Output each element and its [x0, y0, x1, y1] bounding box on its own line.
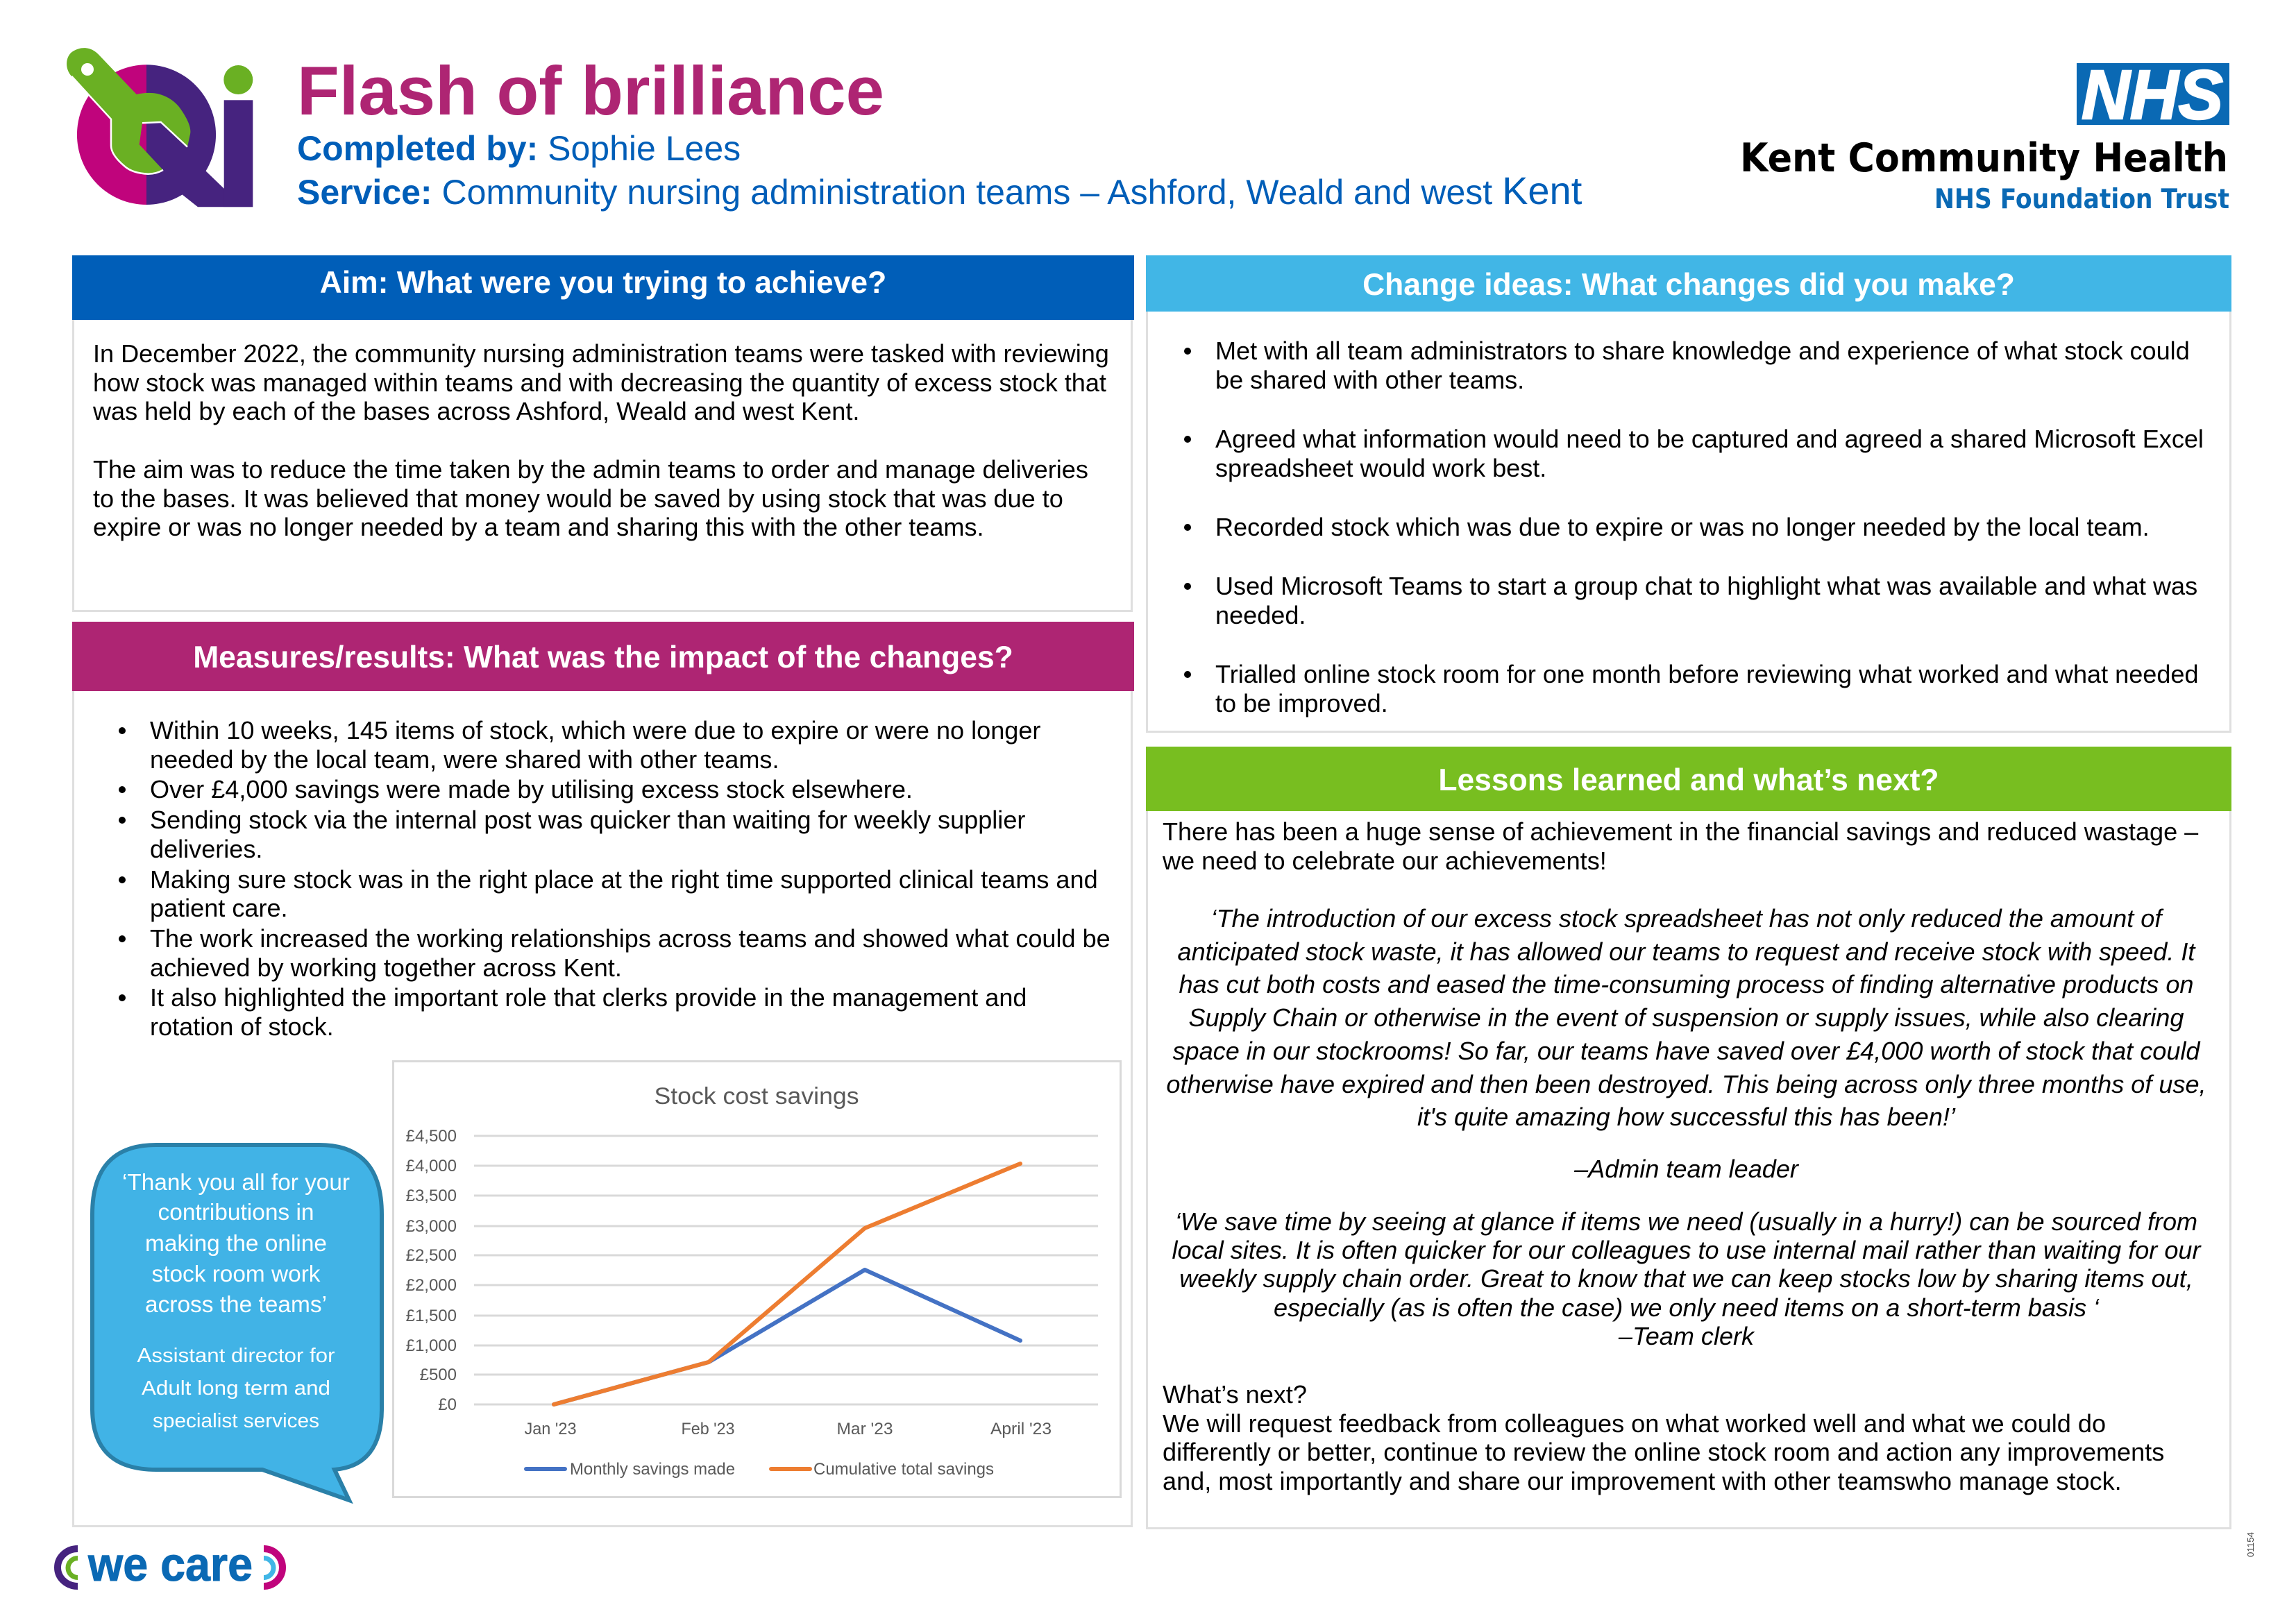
quote: team clerk: –Team clerk [1619, 1322, 1754, 1350]
callout: thank you quote: contributions in [158, 1199, 314, 1225]
callout: thank you quote [90, 1143, 384, 1504]
y axis labels: £1,000 [406, 1336, 457, 1355]
reference code: 01154 [2245, 1532, 2256, 1557]
list: changes: be shared with other teams. [1215, 366, 1524, 394]
callout: thank you quote: Adult long term and [142, 1377, 330, 1400]
quote: team clerk: local sites. It is often quicker for our colleagues to use internal mail rather than waiting for our [1172, 1236, 2200, 1264]
list: results: Within 10 weeks, 145 items of stock, which were due to expire or were no longer [150, 716, 1040, 745]
list: results: Sending stock via the internal post was quicker than waiting for weekly supplier [150, 806, 1025, 834]
logo: QI wrench [67, 48, 253, 207]
list: results: rotation of stock. [150, 1012, 334, 1041]
list: changes: Met with all team administrators to share knowledge and experience of what stock could [1215, 337, 2190, 365]
x axis labels: Jan '23 [525, 1420, 576, 1438]
list: results: achieved by working together across Kent. [150, 953, 622, 982]
panel: aim [72, 255, 1133, 612]
text: aim: how stock was managed within teams and with decreasing the quantity of excess stock that [93, 368, 1106, 397]
panel: change ideas [1146, 255, 2231, 733]
heading: lessons learned: Lessons learned and what’s next? [1438, 763, 1939, 797]
quote: admin team leader [1166, 904, 2206, 1131]
callout: thank you quote: Assistant director for [137, 1345, 335, 1367]
list: results: It also highlighted the important role that clerks provide in the management and [150, 983, 1027, 1012]
y axis labels: £2,000 [406, 1276, 457, 1295]
y axis labels: £3,000 [406, 1217, 457, 1236]
quote: admin team leader: Supply Chain or otherwise in the event of suspension or supply issues, while also clearing [1189, 1003, 2184, 1032]
heading: change ideas [1146, 255, 2231, 312]
chart title: Stock cost savings [654, 1083, 859, 1110]
y axis labels [406, 1127, 457, 1414]
quote: admin team leader: has cut both costs and eased the time-consuming process of finding alternative products on [1179, 970, 2193, 999]
list: changes: needed. [1215, 601, 1306, 629]
text: aim: was held by each of the bases across Ashford, Weald and west Kent. [93, 397, 859, 425]
completed by: Completed by: Sophie Lees [297, 129, 741, 168]
text: lessons intro [1163, 817, 2199, 875]
text: what's next [1163, 1380, 2164, 1495]
line: monthly savings [554, 1270, 1020, 1404]
legend: Monthly savings made [570, 1460, 735, 1479]
x axis labels: Mar '23 [837, 1420, 893, 1438]
text: aim: In December 2022, the community nursing administration teams were tasked with reviewing [93, 339, 1109, 368]
list: changes: spreadsheet would work best. [1215, 454, 1546, 482]
text: aim [93, 339, 1109, 541]
text: what's next: and, most importantly and share our improvement with other teamswho manage stock. [1163, 1467, 2122, 1495]
quote: team clerk: ‘We save time by seeing at glance if items we need (usually in a hurry!) can be sourced from [1175, 1207, 2197, 1236]
heading: aim [72, 255, 1134, 320]
text: what's next: differently or better, continue to review the online stock room and action any improvements [1163, 1438, 2164, 1466]
panel: lessons learned [1146, 747, 2231, 1529]
legend [526, 1460, 994, 1479]
callout: thank you quote: stock room work [151, 1261, 321, 1286]
list: changes: Used Microsoft Teams to start a group chat to highlight what was available and what was [1215, 572, 2197, 600]
callout: thank you quote: specialist services [153, 1410, 319, 1432]
list: changes [1184, 337, 2204, 717]
y axis labels: £1,500 [406, 1307, 457, 1325]
list: results: needed by the local team, were shared with other teams. [150, 745, 779, 774]
callout: thank you quote: across the teams’ [145, 1291, 327, 1317]
x axis labels: Feb '23 [682, 1420, 734, 1438]
text: what's next: We will request feedback from colleagues on what worked well and what we could do [1163, 1409, 2106, 1438]
list: changes: Recorded stock which was due to expire or was no longer needed by the local team. [1215, 513, 2150, 541]
list: changes: to be improved. [1215, 689, 1388, 717]
callout: thank you quote: making the online [145, 1230, 327, 1256]
quote: admin team leader: space in our stockrooms! So far, our teams have saved over £4,000 worth of stock that could [1173, 1037, 2200, 1065]
line: cumulative savings [554, 1164, 1020, 1404]
text: lessons intro: we need to celebrate our achievements! [1163, 847, 1607, 875]
logo: NHS Kent Community Health [1740, 59, 2229, 215]
heading: measures: Measures/results: What was the impact of the changes? [193, 640, 1013, 674]
quote: team clerk [1172, 1207, 2202, 1350]
heading: measures [72, 622, 1134, 691]
text: aim: expire or was no longer needed by a team and sharing this with the other teams. [93, 513, 984, 541]
callout: thank you quote: ‘Thank you all for your [122, 1169, 350, 1195]
heading: change ideas: Change ideas: What changes did you make? [1362, 268, 2015, 302]
text: aim: to the bases. It was believed that money would be saved by using stock that was due to [93, 484, 1063, 513]
list: results: Over £4,000 savings were made by utilising excess stock elsewhere. [150, 775, 913, 804]
panel: measures and results [72, 622, 1133, 1527]
text: aim: The aim was to reduce the time taken by the admin teams to order and manage deliveries [93, 455, 1088, 484]
y axis labels: £4,000 [406, 1157, 457, 1175]
list: results: Making sure stock was in the right place at the right time supported clinical teams and [150, 865, 1098, 894]
x axis labels [525, 1420, 1052, 1438]
service: Service: Community nursing administration teams – Ashford, Weald and west Kent [297, 169, 1582, 212]
y axis labels: £0 [438, 1395, 457, 1414]
quote: admin team leader: anticipated stock waste, it has allowed our teams to request and receive stock with speed. It [1178, 937, 2195, 966]
list: changes: Trialled online stock room for one month before reviewing what worked and what needed [1215, 660, 2199, 688]
quote: team clerk: weekly supply chain order. Great to know that we can keep stocks low by sharing items out, [1179, 1264, 2193, 1293]
text: lessons intro: There has been a huge sense of achievement in the financial savings and reduced wastage – [1163, 817, 2198, 846]
y axis labels: £3,500 [406, 1187, 457, 1205]
title: Flash of brilliance [297, 53, 884, 130]
quote: admin team leader: otherwise have expired and then been destroyed. This being across only three months of use, [1166, 1070, 2206, 1098]
heading: lessons learned [1146, 747, 2231, 811]
y axis labels: £2,500 [406, 1246, 457, 1265]
y axis labels: £500 [420, 1366, 457, 1384]
list: results: patient care. [150, 894, 288, 922]
chart: stock cost savings [392, 1060, 1122, 1498]
legend: Cumulative total savings [813, 1460, 994, 1479]
heading: aim: Aim: What were you trying to achieve? [320, 266, 886, 300]
y axis labels: £4,500 [406, 1127, 457, 1146]
list: results: deliveries. [150, 835, 262, 863]
quote: admin team leader: ‘The introduction of our excess stock spreadsheet has not only reduced the amount of [1211, 904, 2161, 933]
quote: team clerk: especially (as is often the case) we only need items on a short-term basis ‘ [1274, 1293, 2099, 1322]
attribution: admin team leader: –Admin team leader [1574, 1155, 1798, 1183]
list: results: The work increased the working relationships across teams and showed what could be [150, 924, 1111, 953]
x axis labels: April '23 [990, 1420, 1052, 1438]
list: changes: Agreed what information would need to be captured and agreed a shared Microsoft Excel [1215, 425, 2204, 453]
quote: admin team leader: it's quite amazing how successful this has been!’ [1417, 1103, 1955, 1131]
list: results [119, 716, 1111, 1041]
text: what's next: What’s next? [1163, 1380, 1307, 1409]
